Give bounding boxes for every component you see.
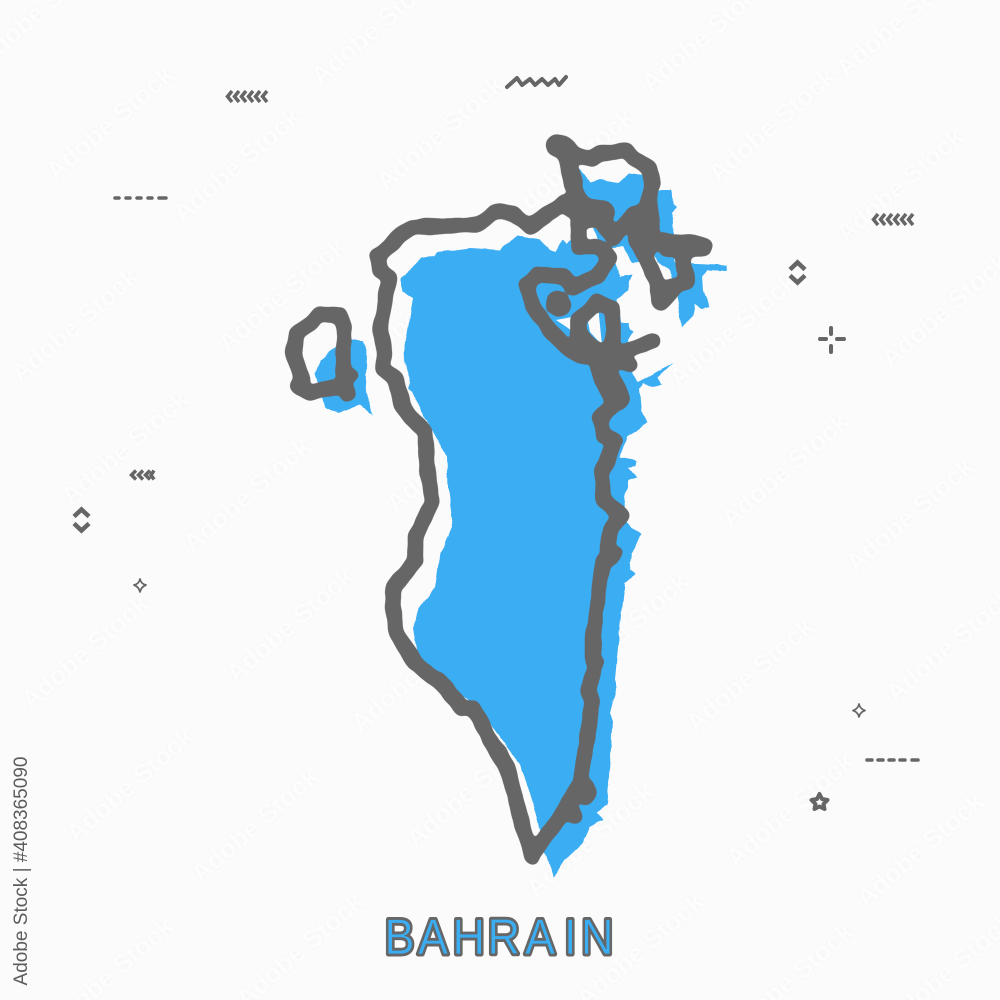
watermark pattern: Adobe Stock (40, 59, 179, 186)
watermark pattern: Adobe Stock (850, 786, 989, 913)
decoration: sparkle right (853, 704, 865, 717)
decoration: chevrons left (132, 470, 154, 480)
decoration: diamond chevrons right (790, 262, 805, 282)
watermark pattern: Adobe Stock (555, 566, 694, 693)
watermark pattern: Adobe Stock (177, 431, 316, 558)
watermark pattern: Adobe Stock (220, 561, 359, 688)
watermark pattern: Adobe Stock (840, 451, 979, 578)
watermark pattern: Adobe Stock (400, 726, 539, 853)
watermark pattern: Adobe Stock (370, 69, 509, 196)
decoration: dashes top left (115, 196, 166, 200)
decoration: diamond chevrons left (74, 510, 89, 530)
watermark pattern: Adobe Stock (500, 101, 639, 228)
country name: BAHRAIN: BAHRAIN (384, 910, 614, 966)
decoration: dashes bottom right (867, 758, 918, 762)
watermark pattern: Adobe Stock (5, 261, 144, 388)
decoration: zigzag top (507, 77, 566, 87)
watermark pattern: Adobe Stock (212, 231, 351, 358)
watermark pattern: Adobe Stock (830, 121, 969, 248)
watermark pattern: Adobe Stock (380, 391, 519, 518)
watermark pattern: Adobe Stock (680, 611, 819, 738)
watermark pattern: Adobe Stock (702, 61, 841, 188)
stock credit text: Adobe Stock | #408365090 (11, 757, 32, 985)
white channels on the main island (556, 262, 672, 345)
decoration: chevrons right (874, 214, 913, 225)
watermark pattern: Adobe Stock (185, 761, 324, 888)
country name: BAHRAIN: BAHRAIN (384, 910, 614, 966)
decoration: chevrons top left (228, 91, 267, 102)
decoration: star (812, 794, 828, 809)
watermark pattern: Adobe Stock (663, 266, 802, 393)
watermark pattern: Adobe Stock (520, 776, 659, 903)
grey outline: all islands (293, 145, 705, 856)
decoration: crosshair (820, 328, 844, 352)
watermark pattern: Adobe Stock (720, 746, 859, 873)
watermark pattern: Adobe Stock (167, 101, 306, 228)
watermark pattern: Adobe Stock (345, 251, 484, 378)
watermark pattern: Adobe Stock (55, 384, 194, 511)
watermark pattern: Adobe Stock (60, 721, 199, 848)
blue fill: all islands (315, 165, 727, 877)
map: Bahrain (293, 145, 727, 877)
decoration: sparkle left (134, 579, 146, 592)
watermark pattern: Adobe Stock (715, 406, 854, 533)
watermark pattern: Adobe Stock (345, 611, 484, 738)
watermark pattern: Adobe Stock (483, 466, 622, 593)
watermark pattern: Adobe Stock (15, 588, 154, 715)
